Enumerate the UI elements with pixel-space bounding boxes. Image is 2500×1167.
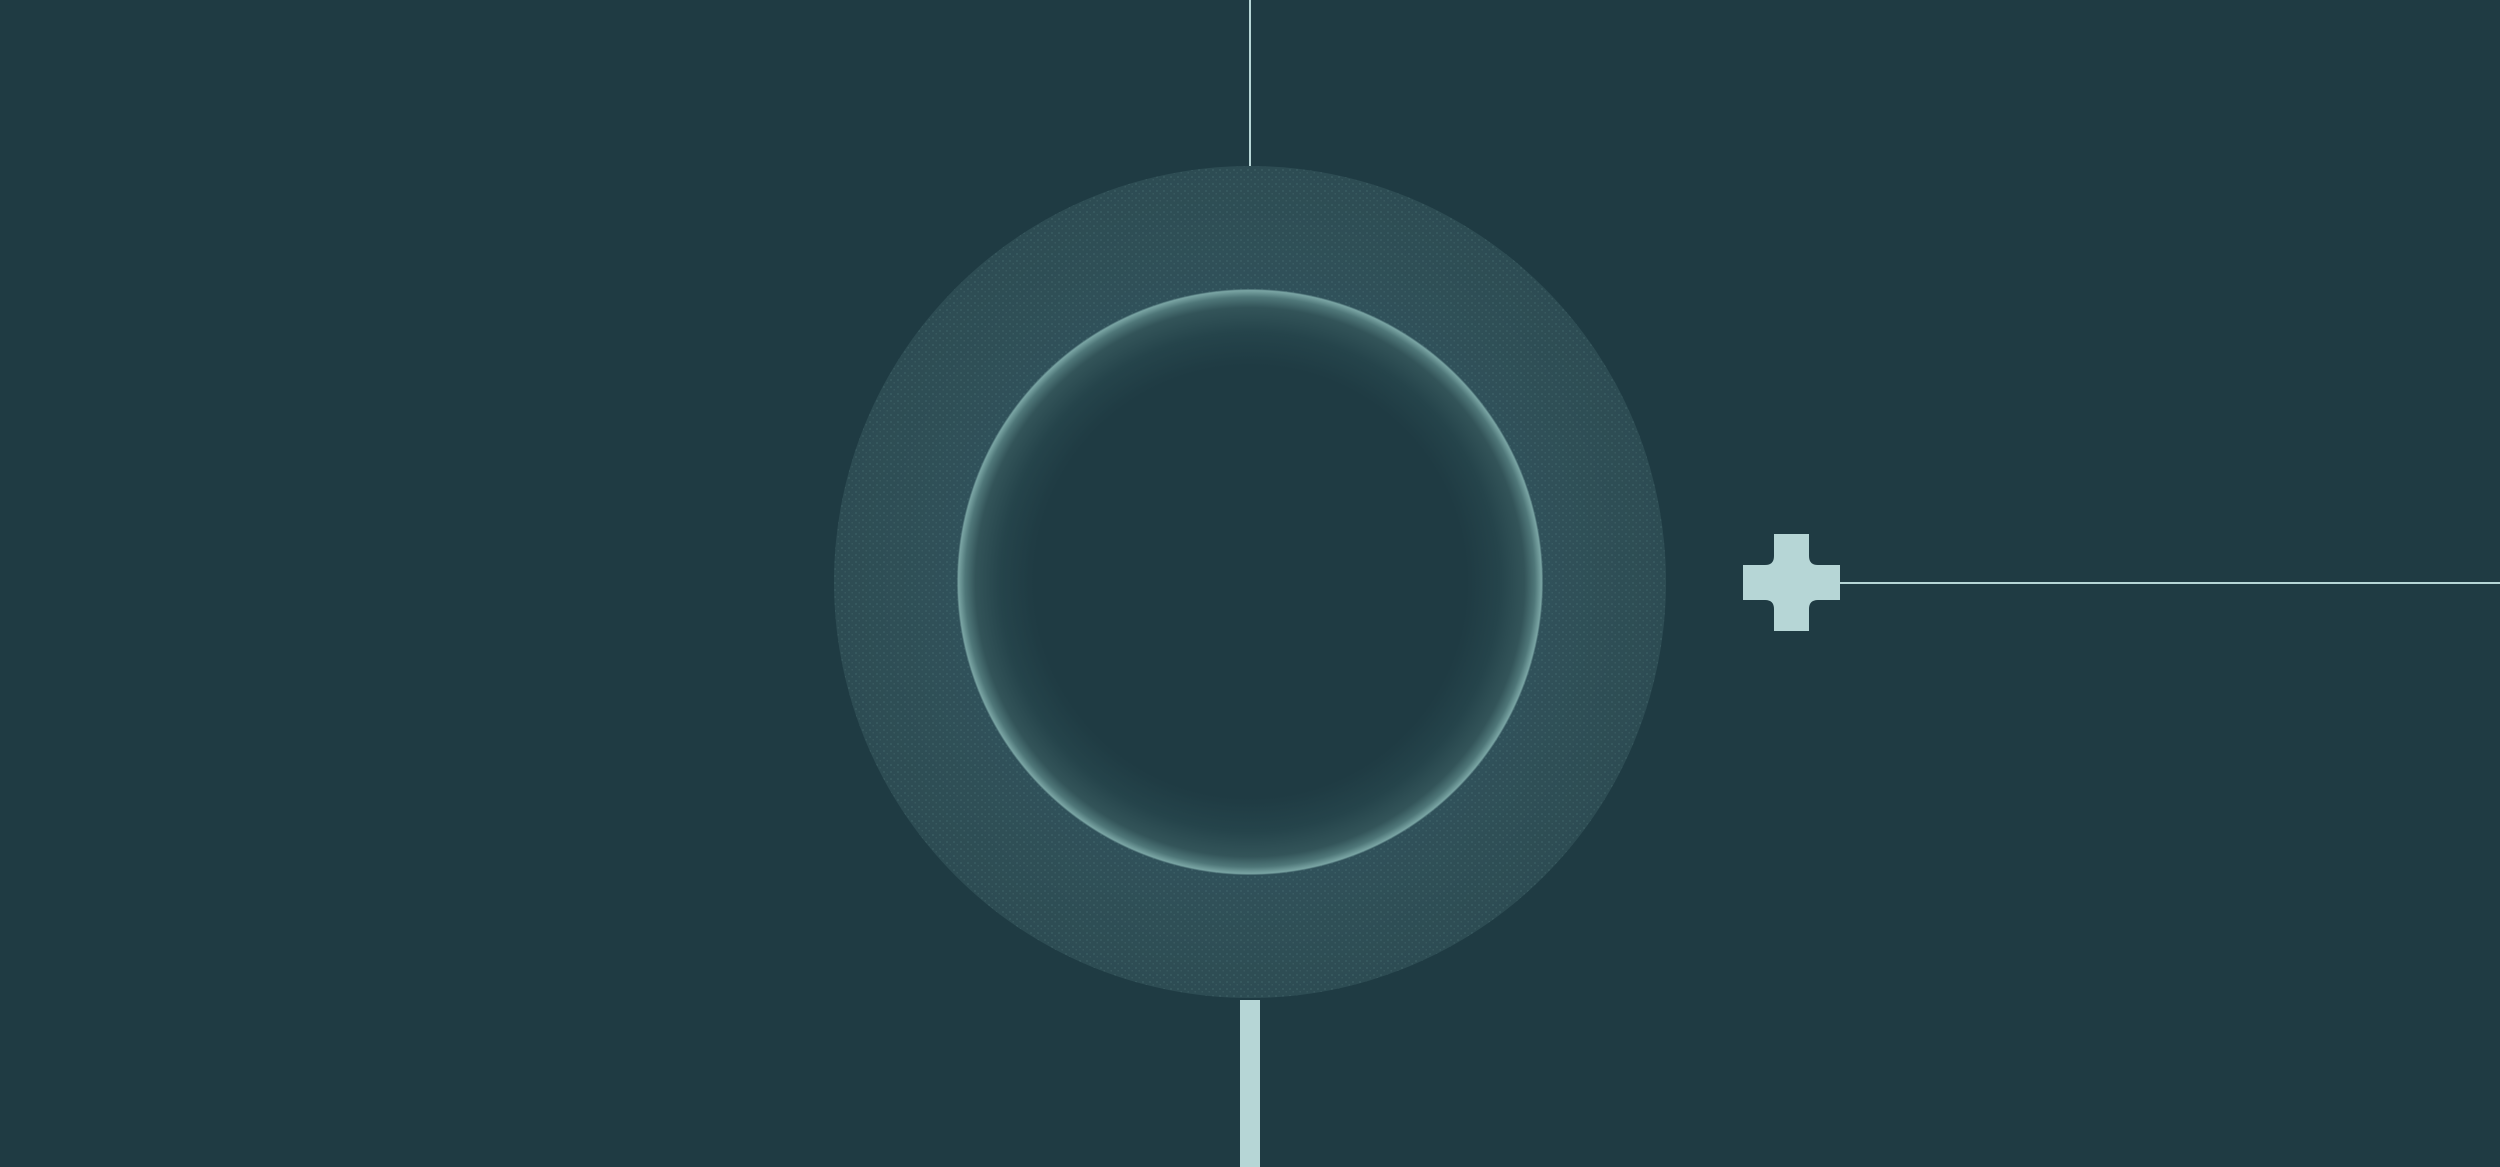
dotted ring circle <box>834 166 1666 998</box>
horizontal connector line <box>1840 582 2500 584</box>
top vertical line <box>1249 0 1251 166</box>
bottom bar <box>1240 1000 1260 1167</box>
plus icon <box>1743 534 1840 631</box>
